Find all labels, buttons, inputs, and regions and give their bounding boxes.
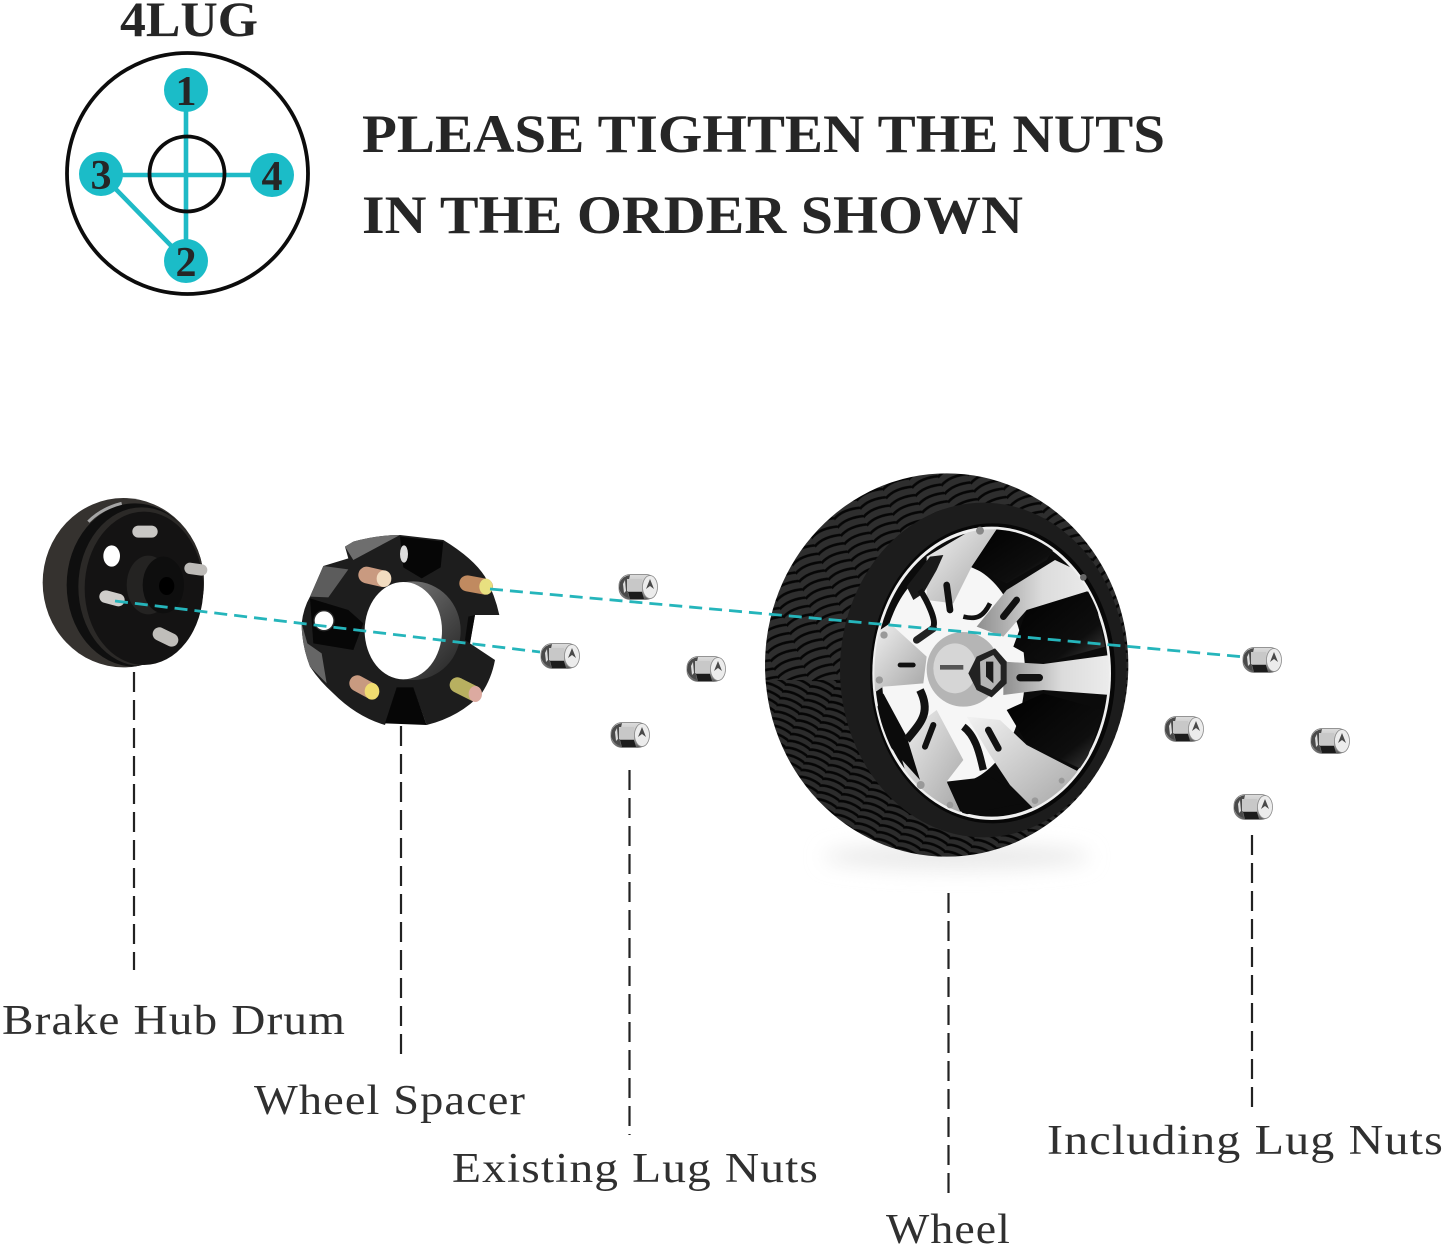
label: Wheel Spacer: Wheel Spacer: [254, 1078, 526, 1124]
leader line: wheel spacer: [400, 726, 402, 1058]
image: wheel spacer: [302, 535, 499, 725]
lug 3: [79, 152, 123, 199]
rim spokes: [870, 525, 1111, 818]
icon: lug nut (included, left): [1165, 716, 1204, 742]
label: Brake Hub Drum: Brake Hub Drum: [2, 998, 346, 1044]
lug 4: [250, 153, 294, 200]
hub cap: [927, 632, 1007, 707]
heading: tightening instruction: PLEASE TIGHTEN THE NUTS: [362, 104, 1165, 164]
leader line: including lug nuts: [1251, 835, 1253, 1112]
icon: lug nut (included, bottom): [1234, 794, 1272, 820]
leader line: wheel: [947, 893, 950, 1198]
tyre tread: [765, 473, 1128, 857]
diagram: 4-lug tightening order: [67, 53, 308, 294]
lug 2: [164, 239, 208, 286]
label: Including Lug Nuts: Including Lug Nuts: [1047, 1118, 1444, 1164]
label: Existing Lug Nuts: Existing Lug Nuts: [452, 1146, 819, 1192]
leader line: brake hub drum: [133, 672, 135, 970]
icon: lug nut (existing, top): [619, 574, 658, 600]
lug 2: 2: [176, 240, 196, 286]
arrow: teal alignment line through spacer stud and wheel to lug nut: [490, 589, 1245, 657]
image: brake hub drum: [43, 498, 205, 667]
arrow: teal alignment line through hub and spacer to lug nut: [115, 601, 540, 652]
image: wheel with tyre and rim: [765, 473, 1128, 869]
icon: lug nut (included, top): [1243, 648, 1282, 672]
icon: lug nut (included, right): [1311, 728, 1350, 754]
lug 3: 3: [90, 153, 112, 199]
tyre sidewall: [840, 503, 1127, 837]
icon: lug nut (existing, bottom): [611, 722, 650, 748]
icon: lug nut (existing, right): [687, 656, 726, 682]
icon: lug nut (existing, left): [541, 644, 580, 668]
lug 1: [164, 68, 208, 115]
heading: tightening instruction: IN THE ORDER SHOWN: [362, 185, 1023, 245]
lug 4: 4: [262, 154, 282, 200]
lug 1: 1: [176, 69, 196, 115]
leader line: existing lug nuts: [628, 770, 631, 1135]
heading: tightening instruction: [362, 104, 1165, 245]
